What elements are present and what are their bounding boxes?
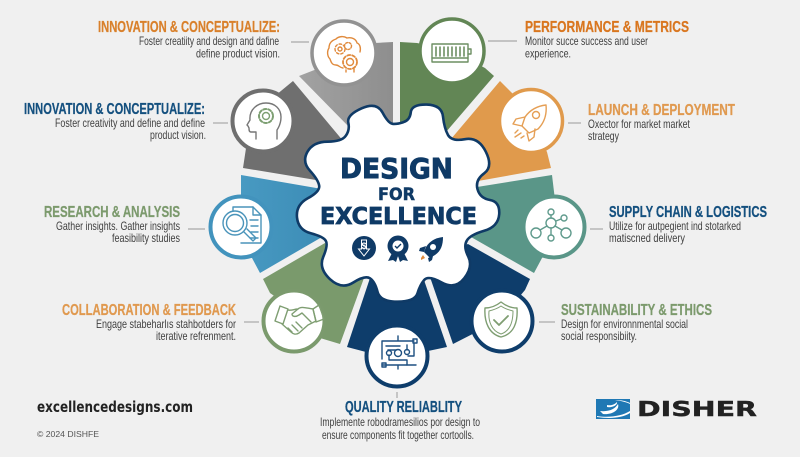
body text line 2: define product vision. (196, 46, 280, 60)
connector line (396, 392, 398, 398)
title: SUSTAINABILITY & ETHICS (561, 302, 712, 319)
panel: collaboration and feedback (62, 243, 364, 352)
heading: for: FOR (378, 185, 415, 204)
body text: Utilize for autpegient ind stotarked (609, 219, 741, 233)
panel: research and analysis (44, 175, 340, 273)
body text line 2: strategy (588, 129, 619, 143)
icon: head with gear (247, 103, 281, 139)
logo mark (596, 399, 630, 419)
body text: Foster creatiity and design and dafine (139, 34, 279, 48)
icon ring: rocket (500, 90, 562, 152)
icon: battery gauge (432, 44, 471, 62)
panel: supply chain and logistics (460, 175, 767, 273)
panel: innovation and conceptualize (top) (98, 19, 393, 140)
segment: navy bottom (347, 270, 447, 352)
body text line 2: product vision. (150, 128, 206, 142)
title: QUALITY RELIABLITY (345, 399, 462, 416)
title: INNOVATION & CONCEPTUALIZE: (98, 19, 280, 36)
connector line (539, 321, 555, 323)
gear shape (297, 105, 499, 302)
logo: Disher (596, 397, 757, 421)
icon: award ribbon (388, 236, 408, 262)
panel: innovation and conceptualize (upper left) (24, 81, 344, 181)
segment: blue (225, 175, 340, 273)
logo wordmark: DISHER (637, 397, 757, 421)
title: RESEARCH & ANALYSIS (44, 204, 180, 221)
body text line 2: social responsibiity. (561, 329, 637, 343)
segment: dark gray (243, 81, 344, 181)
icon: document and magnifier (223, 207, 261, 243)
segment: green (400, 42, 494, 140)
icon ring: network (524, 196, 584, 258)
body text: Oxector for market market (588, 117, 690, 131)
footer: copyright: © 2024 DISHFE (37, 429, 99, 439)
icon ring: shield (472, 290, 532, 352)
icon: dollar badge (352, 236, 376, 260)
body text line 2: feasibility studies (112, 231, 180, 245)
icon: handshake (275, 305, 324, 334)
icon: shield with check (485, 302, 517, 337)
icon: blueprint diagram (382, 336, 417, 369)
body text: Design for environnmental social (561, 317, 688, 331)
icon: rocket (513, 105, 546, 141)
panel: sustainability and ethics (430, 244, 712, 352)
body text: Gather insights. Gather insights (56, 219, 180, 233)
connector line (568, 122, 581, 124)
body text line 2: iterative refrenment. (156, 329, 236, 343)
body text line 2: ensure components fit together cortoolls. (322, 428, 474, 442)
title: PERFORMANCE & METRICS (525, 19, 689, 36)
footer: website: excellencedesigns.com (37, 398, 193, 416)
connector line (188, 228, 205, 230)
body text: Engage stabeharlıs stahbotders for (96, 317, 236, 331)
title: INNOVATION & CONCEPTUALIZE: (24, 101, 205, 118)
connector line (291, 41, 309, 43)
connector line (488, 40, 517, 42)
connector line (244, 321, 259, 323)
heading: excellence: EXCELLENCE (320, 204, 477, 230)
body text line 2: experience. (525, 46, 571, 60)
icon ring: document (210, 196, 272, 258)
segment: teal (460, 175, 570, 273)
icon: brain with gears (328, 37, 360, 72)
segment: light gray (299, 42, 393, 140)
central gear (297, 105, 499, 302)
panel: launch and deployment (451, 81, 735, 181)
panel: quality reliability (320, 270, 480, 442)
segment: orange (451, 81, 551, 181)
icon ring: battery (420, 19, 484, 83)
icon: navy rocket (419, 237, 443, 262)
body text line 2: matiscned delivery (609, 231, 685, 245)
body text: Monitor succe success and user (525, 34, 648, 48)
segment: olive green (263, 243, 364, 344)
icon ring: head (232, 90, 294, 152)
icon ring: blueprint (366, 326, 428, 386)
body text: Foster creativity and define and define (55, 116, 205, 130)
panel: performance and metrics (400, 19, 689, 140)
icon ring: handshake (264, 290, 324, 352)
icon ring: brain (312, 21, 376, 85)
icon: network nodes (531, 209, 571, 241)
title: LAUNCH & DEPLOYMENT (588, 102, 735, 119)
title: COLLABORATION & FEEDBACK (62, 302, 237, 319)
segment: navy right (430, 244, 530, 344)
connector line (590, 228, 603, 230)
icon: dollar badge: $ (361, 241, 367, 251)
heading: design: DESIGN (340, 153, 453, 185)
connector line (213, 122, 228, 124)
body text: Implemente robodramesilios por design to (320, 415, 480, 429)
